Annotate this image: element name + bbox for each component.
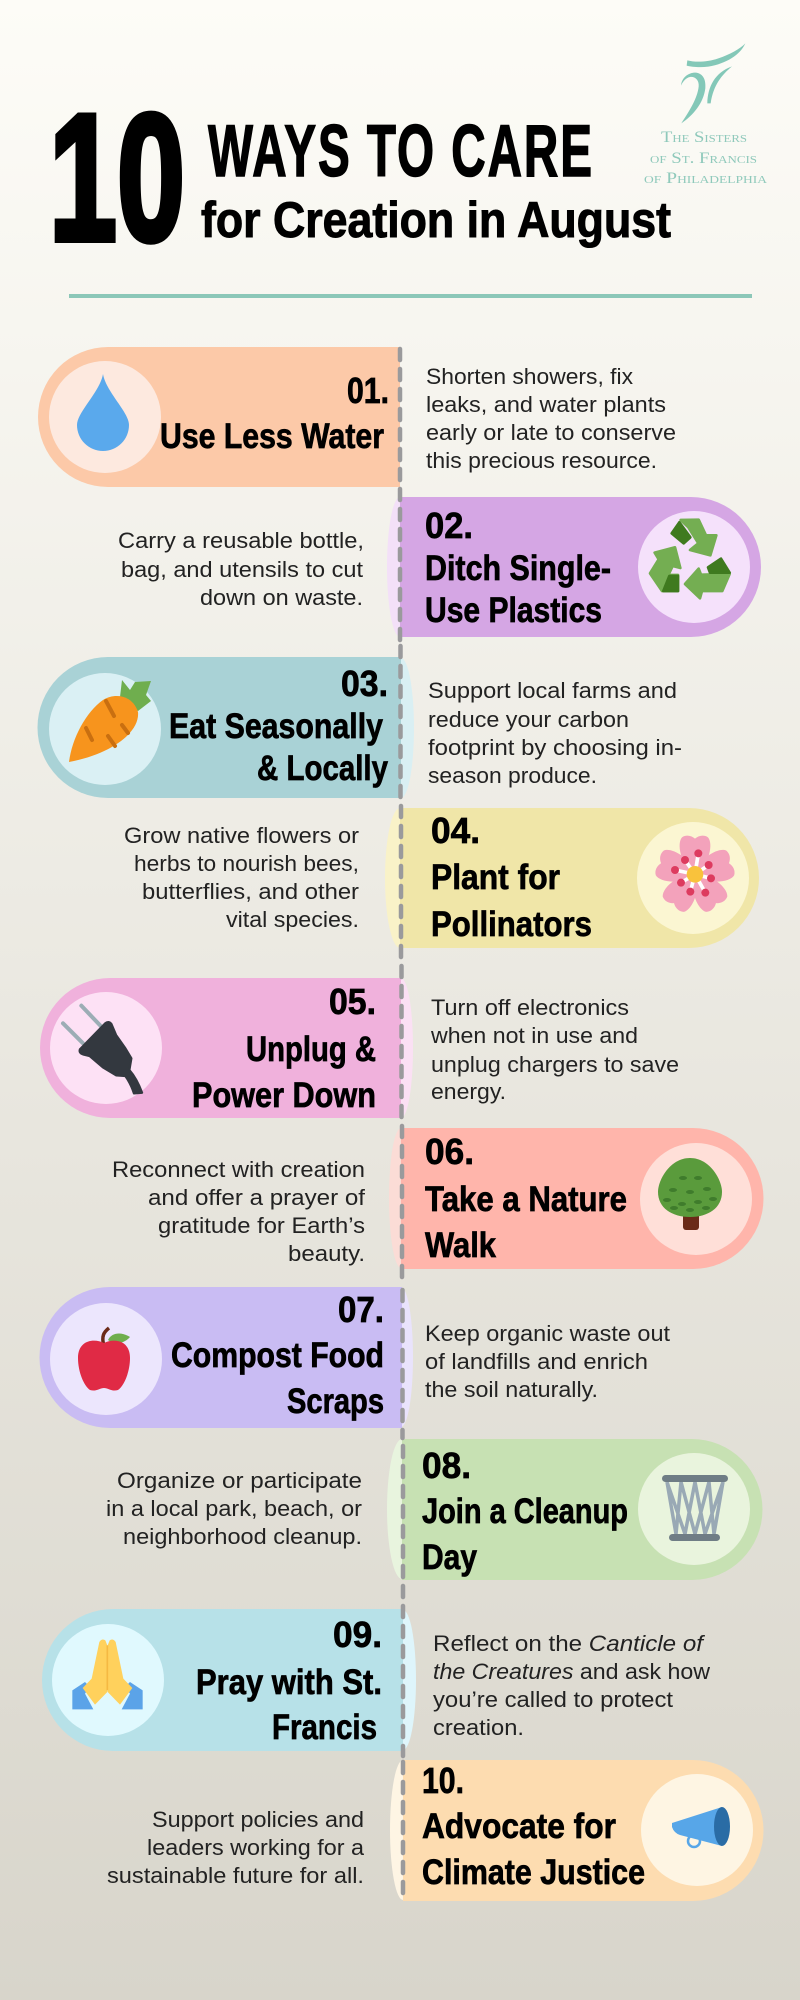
text: 04 description: herbs to nourish bees, bbox=[134, 851, 359, 876]
text: 07 description: Keep organic waste out bbox=[425, 1321, 670, 1346]
text: 01 description: this precious resource. bbox=[426, 448, 657, 473]
logo text: of Philadelphia bbox=[644, 170, 767, 187]
logo text: The Sisters bbox=[661, 129, 747, 146]
text: 05 description bbox=[430, 995, 679, 1104]
text: 02 description: Carry a reusable bottle, bbox=[118, 528, 364, 553]
number 01: 01. bbox=[347, 370, 389, 411]
text: 09 description: Reflect on the Canticle of bbox=[433, 1631, 706, 1656]
number 04: 04. bbox=[431, 810, 480, 851]
text: 07 description: the soil naturally. bbox=[425, 1377, 598, 1402]
heading: compost food scraps bbox=[171, 1336, 384, 1421]
heading: pray with st. francis: Francis bbox=[272, 1708, 377, 1747]
text: 04 description: vital species. bbox=[226, 907, 359, 932]
number 02: 02. bbox=[425, 505, 473, 546]
panel: 07 compost food scraps bbox=[40, 1287, 413, 1428]
panel: 04 plant for pollinators bbox=[385, 808, 759, 948]
number 03: 03. bbox=[341, 663, 388, 704]
panel: 08 join a cleanup day bbox=[387, 1439, 762, 1580]
heading: pray with st. francis bbox=[196, 1663, 382, 1747]
text: 08 description: in a local park, beach, or bbox=[106, 1496, 362, 1521]
heading: compost food scraps: Compost Food bbox=[171, 1336, 384, 1375]
text: 03 description: season produce. bbox=[428, 763, 597, 788]
text: 07 description bbox=[425, 1321, 670, 1402]
heading: unplug and power down: Power Down bbox=[192, 1076, 376, 1115]
heading: join a cleanup day bbox=[422, 1492, 628, 1577]
text: 10 description bbox=[107, 1807, 365, 1888]
heading: ditch single-use plastics: Use Plastics bbox=[425, 591, 602, 630]
text: 03 description bbox=[428, 678, 682, 788]
heading: unplug and power down bbox=[192, 1030, 376, 1115]
heading: advocate for climate justice: Climate Justice bbox=[422, 1853, 645, 1892]
text: 08 description: Organize or participate bbox=[117, 1468, 362, 1493]
panel: 10 advocate for climate justice bbox=[390, 1760, 764, 1901]
icon: praying hands bbox=[72, 1639, 143, 1709]
heading: advocate for climate justice: Advocate for bbox=[422, 1807, 616, 1846]
text: 02 description bbox=[118, 528, 364, 610]
logo text: of St. Francis bbox=[650, 150, 757, 167]
icon: waste bin bbox=[662, 1475, 728, 1541]
heading: take a nature walk: Take a Nature bbox=[425, 1180, 627, 1219]
heading: plant for pollinators: Pollinators bbox=[431, 905, 592, 944]
text: 01 description: early or late to conserve bbox=[426, 420, 676, 445]
text: 06 description: and offer a prayer of bbox=[148, 1185, 366, 1210]
logo text bbox=[644, 129, 767, 187]
text: 02 description: bag, and utensils to cut bbox=[121, 557, 363, 582]
number 07: 07. bbox=[338, 1289, 384, 1330]
heading: eat seasonally and locally bbox=[169, 707, 388, 788]
heading: use less water: Use Less Water bbox=[160, 417, 384, 456]
text: 06 description: Reconnect with creation bbox=[112, 1157, 365, 1182]
title bbox=[49, 77, 671, 279]
text: 09 description bbox=[433, 1631, 710, 1740]
icon: apple bbox=[78, 1328, 130, 1391]
icon: plug bbox=[63, 1006, 142, 1093]
text: 05 description: when not in use and bbox=[430, 1023, 638, 1048]
text: 03 description: Support local farms and bbox=[428, 678, 677, 703]
text: 09 description: creation. bbox=[433, 1715, 524, 1740]
number 06: 06. bbox=[425, 1131, 474, 1172]
icon: flower bbox=[653, 836, 736, 915]
panel: 06 take a nature walk bbox=[389, 1128, 764, 1269]
text: 09 description: the Creatures and ask how bbox=[433, 1659, 710, 1684]
heading: eat seasonally and locally: Eat Seasonally bbox=[169, 707, 383, 746]
icon: megaphone bbox=[672, 1807, 730, 1847]
text: 07 description: of landfills and enrich bbox=[425, 1349, 648, 1374]
text: 01 description: leaks, and water plants bbox=[426, 392, 666, 417]
panel: 09 pray with st. francis bbox=[42, 1609, 416, 1751]
text: 01 description bbox=[426, 364, 676, 473]
heading: plant for pollinators: Plant for bbox=[431, 858, 560, 897]
number 08: 08. bbox=[422, 1445, 471, 1486]
heading: ditch single-use plastics: Ditch Single- bbox=[425, 549, 611, 588]
heading: advocate for climate justice bbox=[422, 1807, 645, 1892]
panel: 01 use less water bbox=[38, 347, 400, 487]
heading: join a cleanup day: Day bbox=[422, 1538, 477, 1577]
panel: 05 unplug and power down bbox=[40, 978, 413, 1118]
text: 05 description: unplug chargers to save bbox=[431, 1052, 679, 1077]
number 09: 09. bbox=[333, 1614, 382, 1655]
heading: pray with st. francis: Pray with St. bbox=[196, 1663, 382, 1702]
text: 06 description: gratitude for Earth’s bbox=[158, 1213, 365, 1238]
timeline: dashed centre line bbox=[400, 349, 403, 1900]
panel: 02 ditch single-use plastics bbox=[387, 497, 761, 637]
logo: Sisters of St. Francis of Philadelphia bbox=[644, 43, 767, 187]
text: 04 description: butterflies, and other bbox=[142, 879, 359, 904]
text: 05 description: energy. bbox=[431, 1079, 506, 1104]
text: 05 description: Turn off electronics bbox=[431, 995, 629, 1020]
text: 06 description: beauty. bbox=[288, 1241, 365, 1266]
heading: join a cleanup day: Join a Cleanup bbox=[422, 1492, 628, 1531]
icon: recycle bbox=[650, 520, 730, 598]
heading: take a nature walk bbox=[425, 1180, 627, 1265]
text: 04 description bbox=[124, 823, 359, 932]
number 05: 05. bbox=[329, 981, 376, 1022]
text: 01 description: Shorten showers, fix bbox=[426, 364, 633, 389]
text: 04 description: Grow native flowers or bbox=[124, 823, 359, 848]
icon: water drop bbox=[77, 374, 129, 451]
heading line: ways to care: WAYS TO CARE bbox=[208, 111, 594, 192]
icon: carrot bbox=[69, 680, 151, 762]
text: 10 description: Support policies and bbox=[152, 1807, 364, 1832]
text: 02 description: down on waste. bbox=[200, 585, 363, 610]
heading: unplug and power down: Unplug & bbox=[246, 1030, 376, 1069]
heading: ditch single-use plastics bbox=[425, 549, 611, 630]
text: 03 description: footprint by choosing in- bbox=[428, 735, 682, 760]
heading: take a nature walk: Walk bbox=[425, 1226, 496, 1265]
text: 09 description: you’re called to protect bbox=[433, 1687, 673, 1712]
panel: 03 eat seasonally and locally bbox=[37, 657, 414, 798]
heading line: for creation in august: for Creation in August bbox=[201, 192, 671, 248]
text: 08 description bbox=[106, 1468, 362, 1549]
number 10: 10. bbox=[422, 1760, 464, 1801]
text: 06 description bbox=[112, 1157, 366, 1266]
text: 03 description: reduce your carbon bbox=[428, 707, 629, 732]
heading: plant for pollinators bbox=[431, 858, 592, 944]
heading: eat seasonally and locally: & Locally bbox=[257, 749, 388, 788]
text: 10 description: sustainable future for all. bbox=[107, 1863, 364, 1888]
heading: compost food scraps: Scraps bbox=[287, 1382, 384, 1421]
icon: tree bbox=[658, 1158, 722, 1230]
big number 10: 10 bbox=[49, 77, 185, 279]
logo mark bbox=[681, 43, 745, 123]
text: 08 description: neighborhood cleanup. bbox=[123, 1524, 362, 1549]
text: 10 description: leaders working for a bbox=[147, 1835, 365, 1860]
